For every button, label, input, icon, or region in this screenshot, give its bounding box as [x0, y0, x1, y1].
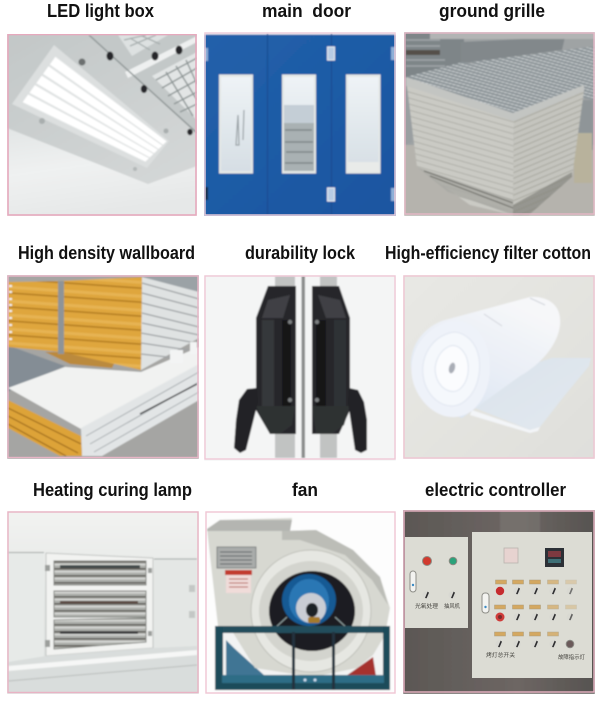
- rotary switches: [513, 587, 521, 595]
- panel: heating curing lamp photo: [7, 511, 199, 694]
- sheet of cotton: [475, 358, 591, 430]
- label: fault indicator: 故障指示灯: [558, 653, 585, 661]
- lower cabinet: [8, 646, 197, 694]
- upper stack white side: [141, 277, 199, 370]
- stacked grille top surface: [406, 62, 584, 114]
- panel: fan photo: [205, 511, 396, 694]
- pink border: [405, 33, 594, 214]
- upper stack yellow faces: [8, 277, 142, 370]
- fan inlet: [269, 571, 355, 651]
- pink border: [404, 511, 594, 692]
- title: Heating curing lamp: Heating curing lamp: [33, 480, 192, 500]
- lower boards: [8, 342, 199, 456]
- middle door window: [282, 74, 316, 174]
- stack right face: [513, 91, 584, 215]
- ceiling grid corner: [89, 34, 197, 133]
- title: ground grille: ground grille: [439, 1, 545, 21]
- left door window: [219, 74, 253, 174]
- panel: ground grille photo: [404, 32, 595, 216]
- title: durability lock: durability lock: [245, 243, 356, 263]
- roll of cotton: [411, 297, 560, 418]
- lamp tray 2: [54, 591, 146, 617]
- pink border: [205, 276, 395, 459]
- background grille stacks: [404, 33, 595, 183]
- left control box: [405, 537, 468, 628]
- displays: [504, 548, 518, 563]
- lower white wall: [7, 128, 197, 216]
- fan housing: [207, 518, 390, 677]
- light box frame: [12, 45, 169, 168]
- pink border: [8, 512, 198, 692]
- pink border: [206, 512, 395, 693]
- lamp tray 1: [54, 561, 146, 585]
- door hinges: [205, 47, 395, 201]
- spec labels: [217, 547, 256, 593]
- lamp cabinet frame: [46, 553, 153, 656]
- panel: high density wallboard photo: [7, 275, 199, 459]
- panel: LED light box photo: [7, 34, 197, 216]
- left lock body: [256, 286, 296, 434]
- right handle: [348, 388, 367, 453]
- label: lamp master switch: 烤灯总开关: [486, 651, 515, 659]
- label: light oxygen treatment: 光氧处理: [415, 602, 438, 610]
- right door window: [346, 74, 380, 174]
- left handle: [234, 388, 258, 453]
- switch lock: [482, 593, 489, 613]
- panel: main door photo: [204, 32, 396, 216]
- teal mounting frame: [215, 626, 390, 690]
- fault lamp: [566, 640, 574, 648]
- title: LED light box: LED light box: [47, 1, 154, 21]
- red buttons: [496, 587, 504, 595]
- dark fittings: [39, 46, 193, 171]
- panel: electric controller photo: [403, 510, 595, 694]
- side cabinet doors: [8, 552, 197, 662]
- title: High density wallboard: High density wallboard: [18, 243, 195, 263]
- title: electric controller: electric controller: [425, 480, 566, 500]
- label: exhaust fan: 抽风机: [444, 602, 460, 610]
- main control box: [472, 532, 592, 678]
- hinges: [45, 565, 152, 647]
- title: fan: fan: [292, 480, 318, 500]
- lamp tray 3: [54, 618, 146, 649]
- pink border: [8, 34, 196, 215]
- stack left face: [407, 86, 514, 215]
- pink border: [8, 276, 198, 458]
- LED light tubes: [22, 56, 167, 162]
- pink border: [205, 33, 395, 215]
- blue motor disk: [275, 574, 347, 628]
- pink border: [404, 276, 594, 458]
- panel: durability lock photo: [204, 275, 396, 460]
- right lock body: [312, 286, 350, 434]
- bottom background of frame: [222, 633, 387, 684]
- title: main door: main door: [262, 1, 351, 21]
- indicator tags: [496, 580, 506, 584]
- panel: filter cotton photo: [403, 275, 595, 459]
